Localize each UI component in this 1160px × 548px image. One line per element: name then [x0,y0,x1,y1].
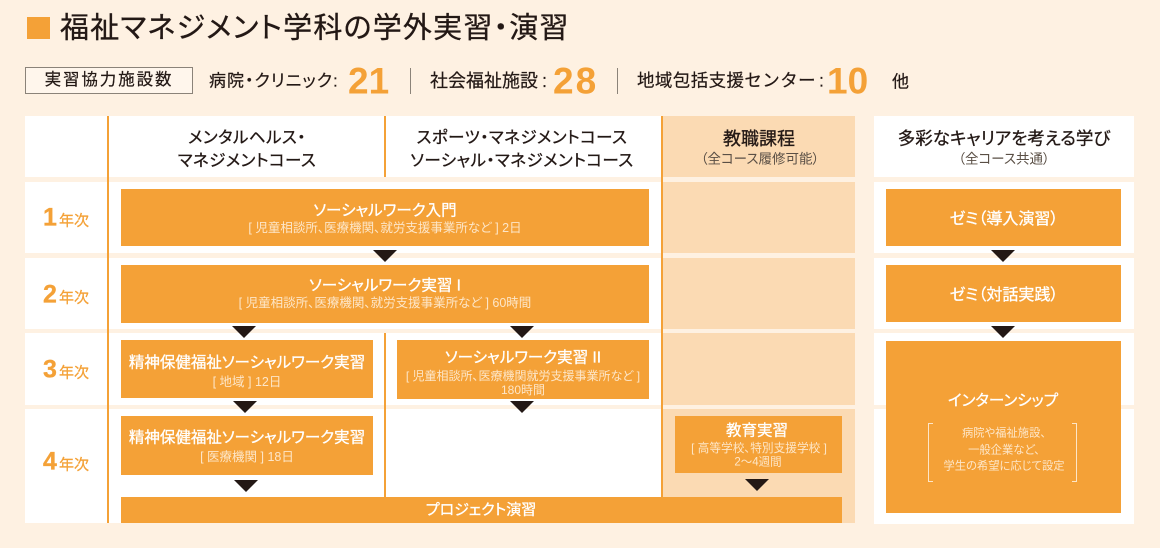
box: seminar intro: ゼミ（導入演習） [950,211,1058,228]
box: psychiatric social work practicum, medical: [ 医療機関 ] 18日 [200,450,294,464]
year label: 2: 2年次 [43,280,89,308]
bracket: right [1072,423,1077,482]
column header: teacher training [701,129,819,166]
box: psychiatric social work practicum, community: [ 地域 ] 12日 [213,375,281,389]
box: psychiatric social work practicum, medical [121,416,373,475]
box: social work practicum I: ソーシャルワーク実習 I [309,277,461,294]
box: internship: 学生の希望に応じて設定 [943,460,1065,472]
row backgrounds [25,116,855,523]
facility counts row [25,60,909,102]
box: internship: 一般企業など、 [968,444,1040,456]
stat: others: 他 [892,72,909,92]
box: seminar intro [886,189,1121,246]
arrow [991,250,1015,262]
column header: teacher training: 教職課程 [723,129,795,149]
arrow [745,479,769,491]
arrow [232,326,256,338]
label: facility count: 実習協力施設数 [45,71,173,89]
box: social work practicum II: [ 児童相談所、医療機関就労支援事業所など ] [406,368,640,382]
box: intro to social work [121,189,649,246]
box: teaching practicum: 2〜4週間 [734,456,782,468]
stat: welfare facilities number: 28 [553,60,598,102]
box: internship: インターンシップ [948,392,1058,409]
year label: 1: 1年次 [43,204,89,232]
arrow [991,326,1015,338]
label: facility count [25,67,193,94]
column header: career learning [874,116,1134,177]
box: social work practicum I [121,265,649,323]
column header: sports and social management course [410,128,634,170]
column header: sports and social management course: スポーツ・マネジメントコース [417,129,627,147]
column header: sports and social management course: ソーシャル・マネジメントコース [410,152,634,170]
year label: 4: 4年次 [43,448,89,476]
panel: curriculum table [25,116,855,523]
box: teaching practicum: 教育実習 [726,422,788,439]
box: teaching practicum: [ 高等学校、特別支援学校 ] [691,442,827,455]
arrow [373,250,397,262]
icon: title square [27,17,50,39]
stat: hospitals label: 病院・クリニック: [209,72,339,90]
box: psychiatric social work practicum, community [121,340,373,398]
box: teaching practicum [675,416,842,473]
box: project seminar: プロジェクト演習 [426,502,536,518]
arrow [233,401,257,413]
box: internship: 病院や福祉施設、 [962,427,1046,439]
stat: welfare facilities label: 社会福祉施設: [430,71,547,91]
box: social work practicum I: [ 児童相談所、医療機関、就労支援事業所など ] 60時間 [239,296,531,310]
box: project seminar [121,497,842,523]
panel: career column [874,182,1134,524]
box: seminar dialogue: ゼミ（対話実践） [950,287,1058,304]
stat: community centers number: 10 [827,60,868,102]
box: internship [886,341,1121,513]
stat: community centers label: 地域包括支援センター: [637,70,824,90]
box: intro to social work: [ 児童相談所、医療機関、就労支援事業所など ] 2日 [248,221,522,235]
box: psychiatric social work practicum, community: 精神保健福祉ソーシャルワーク実習 [129,354,365,371]
title [27,12,570,44]
arrow [234,480,258,492]
box: seminar dialogue [886,265,1121,322]
box: intro to social work: ソーシャルワーク入門 [313,202,457,219]
bracket: left [928,423,933,482]
box: psychiatric social work practicum, medical: 精神保健福祉ソーシャルワーク実習 [129,429,365,446]
stat: hospitals number: 21 [348,60,389,102]
column header: mental health course [178,129,316,170]
column header: career learning: （全コース共通） [958,151,1050,166]
title text: 福祉マネジメント学科の学外実習・演習 [60,12,570,44]
column header: teacher training: （全コース履修可能） [701,151,819,166]
box: social work practicum II [397,340,649,399]
box: social work practicum II: ソーシャルワーク実習 II [445,349,601,366]
year label: 3: 3年次 [43,356,89,384]
arrow [510,401,534,413]
column header: mental health course: マネジメントコース [178,152,316,170]
box: social work practicum II: 180時間 [501,382,545,396]
column header: mental health course: メンタルヘルス・ [188,129,306,147]
arrow [510,326,534,338]
column header: career learning: 多彩なキャリアを考える学び [898,128,1110,148]
